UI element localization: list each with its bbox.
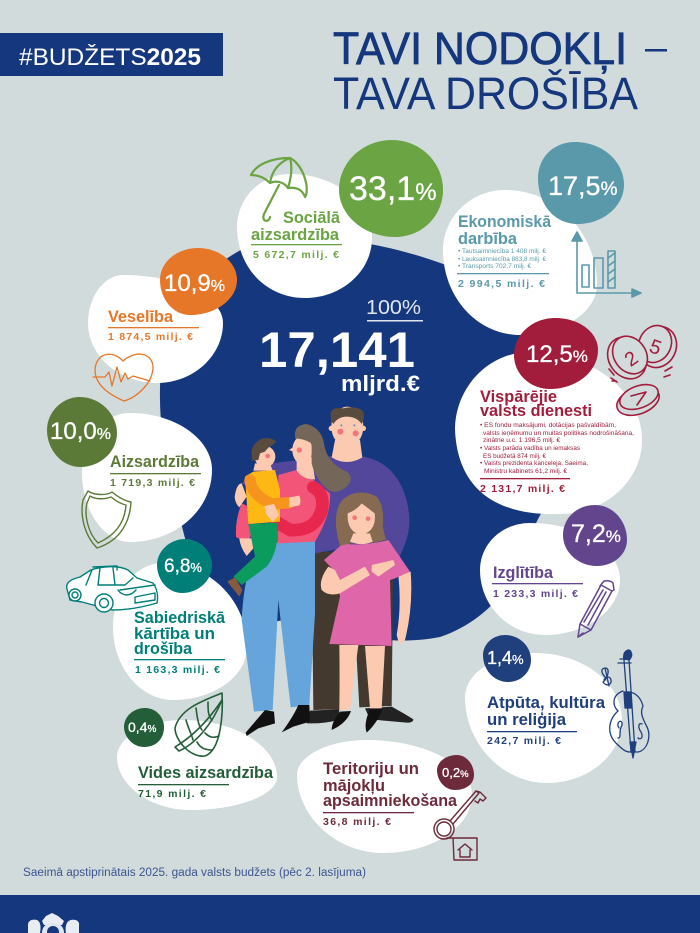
panel: Vispārējie valsts dienesti: • Valsts parāda vadība un iemaksas [480,445,581,452]
icon: police car [67,566,158,612]
man [242,407,413,723]
panel: Ekonomiskā darbība: darbība [458,229,518,248]
panel: Ekonomiskā darbība: • Tautsaimniecība 1 408 milj. € [458,248,546,255]
badge: 10,0% [47,397,117,467]
panel: Aizsardzība [47,397,212,548]
panel: Sociālā aizsardzība: 5 672,7 milj. € [253,249,339,261]
badge: 1,4% [483,635,531,682]
icon: bar chart [572,232,641,297]
panel: Aizsardzība: 1 719,3 milj. € [110,477,195,489]
footer band [0,895,700,933]
panel: Vispārējie valsts dienesti: • Valsts prezidenta kanceleja, Saeima, [480,460,588,467]
badge: 7,2%: 7,2% [571,520,621,548]
icon: coins [600,320,683,421]
panel: Vispārējie valsts dienesti: ES budžetā 874 milj. € [483,453,546,460]
badge: 0,4%: 0,4% [128,719,156,735]
icon: shield [82,491,131,548]
badge: 6,8% [157,539,212,593]
badge: 12,5% [514,318,598,389]
panel: Izglītība [480,505,627,637]
panel: Sabiedriskā kārtība un drošība: kārtība un [134,624,215,643]
icon: pencil [578,581,614,637]
panel: Vispārējie valsts dienesti [455,318,683,514]
total: 17,141 mljrd. € [259,297,423,396]
panel: Sociālā aizsardzība: Sociālā [283,208,341,227]
panel: Teritoriju un mājokļu apsaimniekošana: Teritoriju un [323,759,419,778]
badge: 0,2% [437,755,474,790]
panel: Atpūta, kultūra un reliģija: Atpūta, kultūra [487,693,606,712]
panel: Izglītība: Izglītība [493,563,554,582]
icon: violin [602,650,649,758]
badge: 12,5%: 12,5% [526,341,588,368]
total: 17,141 mljrd. €: mljrd.€ [341,371,420,396]
central navy blob [160,238,575,641]
panel: Ekonomiskā darbība: • Transports 702,7 milj. € [458,263,531,270]
badge: 7,2% [563,505,627,566]
panel: Sabiedriskā kārtība un drošība: Sabiedriskā [134,608,226,627]
panel: Teritoriju un mājokļu apsaimniekošana: mājokļu [323,776,385,795]
panel: Teritoriju un mājokļu apsaimniekošana [297,740,486,860]
panel: Vispārējie valsts dienesti: 2 131,7 milj. € [480,483,565,495]
coin digits: 5 [646,336,664,360]
panel: Vispārējie valsts dienesti: valsts dienesti [480,401,592,420]
badge: 6,8%: 6,8% [164,556,202,577]
total: 17,141 mljrd. €: 100% [366,297,421,319]
icon: key and house [434,791,486,860]
panel: Ekonomiskā darbība: 2 994,5 milj. € [458,278,545,290]
panel: Vispārējie valsts dienesti: zinātne u.c. 1 196,5 milj. € [483,437,560,444]
panel: Ekonomiskā darbība: • Lauksaimniecība 883,8 milj. € [458,256,546,263]
panel: Veselība: 1 874,5 milj. € [108,331,193,343]
icon: umbrella [251,158,307,221]
panel: Teritoriju un mājokļu apsaimniekošana: 36,8 milj. € [323,816,391,828]
panel: Izglītība: 1 233,3 milj. € [493,588,578,600]
panel: Sabiedriskā kārtība un drošība [67,539,247,700]
panel: Vispārējie valsts dienesti: • ES fondu maksājumi, dotācijas pašvaldībām, [480,422,616,429]
badge: 0,2%: 0,2% [442,765,469,780]
panel: Vispārējie valsts dienesti: Ministru kabinets 61,2 milj. € [484,468,567,475]
panel: Sabiedriskā kārtība un drošība: 1 163,3 milj. € [135,664,220,676]
panel: Vispārējie valsts dienesti: Vispārējie [480,387,557,406]
badge: 33,1%: 33,1% [349,170,437,208]
badge: 33,1% [339,140,443,237]
panel: Aizsardzība: Aizsardzība [110,452,200,471]
panel: Veselība [88,248,237,401]
panel: Vides aizsardzība: 71,9 milj. € [138,788,206,800]
panel: Vides aizsardzība: Vides aizsardzība [138,763,274,782]
title [333,23,667,119]
icon: coat of arms [28,913,79,933]
badge: 17,5%: 17,5% [548,171,618,201]
icon: leaf [175,693,222,756]
panel: Atpūta, kultūra un reliģija: 242,7 milj. € [487,735,561,747]
badge: 10,0%: 10,0% [50,418,111,445]
icon: heart with pulse [93,354,153,401]
panel: Vispārējie valsts dienesti: valsts ieņēmumu un muitas politikas nodrošināšana, [483,430,634,437]
total: 17,141 mljrd. €: 17,141 [259,322,415,378]
tag: #BUDŽETS2025 [0,33,223,76]
title: TAVA DROŠĪBA [333,68,638,119]
panel: Sociālā aizsardzība: aizsardzība [251,225,340,244]
girl [321,492,411,733]
panel: Sabiedriskā kārtība un drošība: drošība [134,639,193,658]
panel: Vides aizsardzība [117,693,277,810]
tag: #BUDŽETS2025: #BUDŽETS2025 [19,44,201,71]
panel: Ekonomiskā darbība [443,142,641,335]
panel: Sociālā aizsardzība [237,140,443,298]
badge: 10,9% [160,248,237,315]
coin digits [621,336,664,372]
badge: 0,4% [124,708,164,747]
panel: Teritoriju un mājokļu apsaimniekošana: apsaimniekošana [323,791,458,810]
illustration: family [227,407,413,736]
badge: 10,9%: 10,9% [164,270,225,297]
child [227,438,300,597]
panel: Veselība: Veselība [108,307,174,326]
panel: Atpūta, kultūra un reliģija: un reliģija [487,710,567,729]
panel: Ekonomiskā darbība: Ekonomiskā [458,212,551,231]
coin digits: 2 [621,347,642,372]
woman [235,424,351,736]
badge: 17,5% [538,142,624,224]
panel: Atpūta, kultūra un reliģija [465,635,649,783]
title: TAVI NODOKĻI [333,23,627,74]
badge: 1,4%: 1,4% [487,648,524,668]
source note: Saeimā apstiprinātais 2025. gada valsts budžets (pēc 2. lasījuma) [23,867,366,879]
